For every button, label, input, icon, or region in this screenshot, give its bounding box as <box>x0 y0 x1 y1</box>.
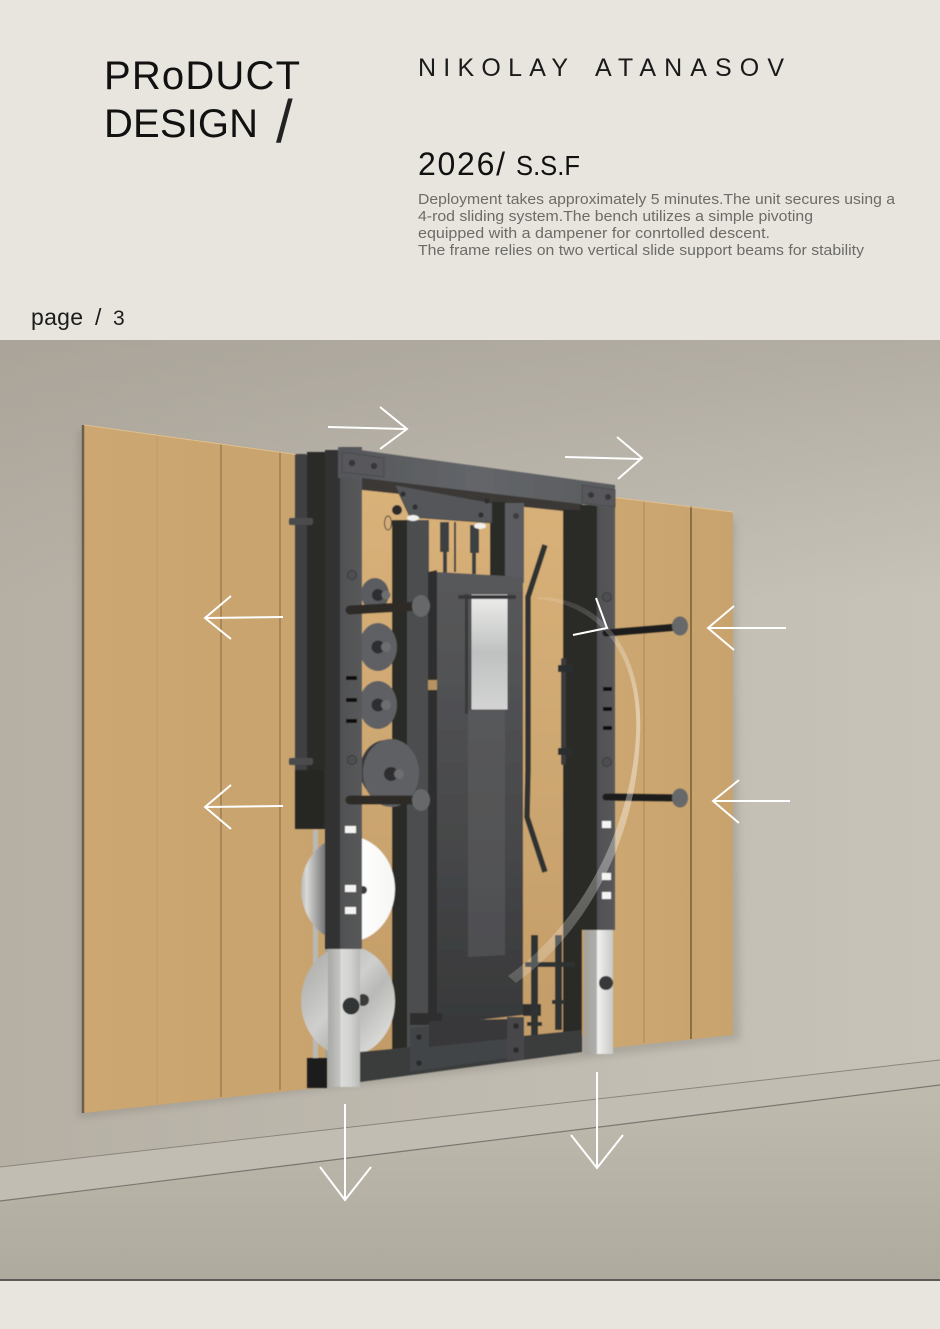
bench centre strip <box>468 710 505 957</box>
arrows: bottom pointing down <box>320 1072 623 1200</box>
wall <box>0 340 940 1200</box>
wall-mounted gym unit <box>289 447 688 1088</box>
pegs and rack hardware at lower right <box>525 935 575 1035</box>
dark slots on right column <box>603 687 612 730</box>
author name: ATANASOV <box>595 54 784 82</box>
description text: equipped with a dampener for conrtolled descent. <box>418 225 770 242</box>
right column <box>580 495 615 930</box>
description text: 4-rod sliding system.The bench utilizes a simple pivoting <box>418 208 813 225</box>
title <box>104 54 300 155</box>
gas struts <box>440 522 479 574</box>
arrows: top pointing right <box>328 407 642 479</box>
arrow: motion head on arc <box>573 598 607 635</box>
description text <box>418 191 896 259</box>
author name: NIKOLAY <box>418 54 568 82</box>
page number <box>31 304 125 330</box>
description text: Deployment takes approximately 5 minutes.The unit secures using a <box>418 191 896 208</box>
year and code heading: S.S.F <box>516 150 580 181</box>
arrows: right pointing left <box>708 606 790 823</box>
curved barbell <box>527 545 545 872</box>
bench foot <box>410 1004 541 1025</box>
right pull-out rods <box>606 616 688 808</box>
hinge bracket <box>384 485 492 530</box>
title: PRoDUCT <box>104 54 300 98</box>
interior tan backing <box>360 478 585 1056</box>
right side channel <box>563 510 582 1035</box>
panel: left tan wall cladding <box>83 425 325 1113</box>
page number: / <box>95 304 102 330</box>
column mounting holes <box>348 570 356 580</box>
folding bench <box>410 570 541 1025</box>
inner right post <box>490 502 524 583</box>
white slots on left column <box>345 826 356 914</box>
wall shadow behind panels <box>78 430 740 1118</box>
description text: The frame relies on two vertical slide support beams for stability <box>418 242 865 259</box>
top strap <box>458 595 516 599</box>
product photo panel <box>0 340 940 1280</box>
baseboard and floor <box>0 1060 940 1280</box>
page number: 3 <box>113 307 125 330</box>
year and code heading <box>418 146 580 182</box>
arc: bench fold motion <box>508 597 640 983</box>
left silver slide leg <box>328 949 360 1087</box>
dark slots on left column <box>346 676 357 723</box>
silver weight discs <box>301 830 395 1088</box>
inner top shadow <box>362 476 582 513</box>
left pull-out rods <box>350 595 430 811</box>
weight plates on left <box>359 578 419 807</box>
title: / <box>276 88 293 155</box>
year and code heading: 2026/ <box>418 146 505 182</box>
author name <box>418 54 784 82</box>
bench mirror pad <box>471 594 508 710</box>
page number: page <box>31 304 83 330</box>
panel: right tan wall cladding <box>610 497 733 1048</box>
white slots on right column <box>602 821 611 899</box>
arrows: left pointing left <box>205 596 283 829</box>
left column <box>325 447 362 949</box>
vertical bar storage tube <box>289 452 325 829</box>
title: DESIGN <box>104 102 258 146</box>
vertical handle <box>558 658 566 766</box>
inner left post <box>392 520 429 1050</box>
top beam <box>338 447 615 508</box>
right silver slide leg <box>584 930 613 1054</box>
photo bottom edge <box>0 1279 940 1281</box>
bottom beam <box>360 1017 582 1082</box>
